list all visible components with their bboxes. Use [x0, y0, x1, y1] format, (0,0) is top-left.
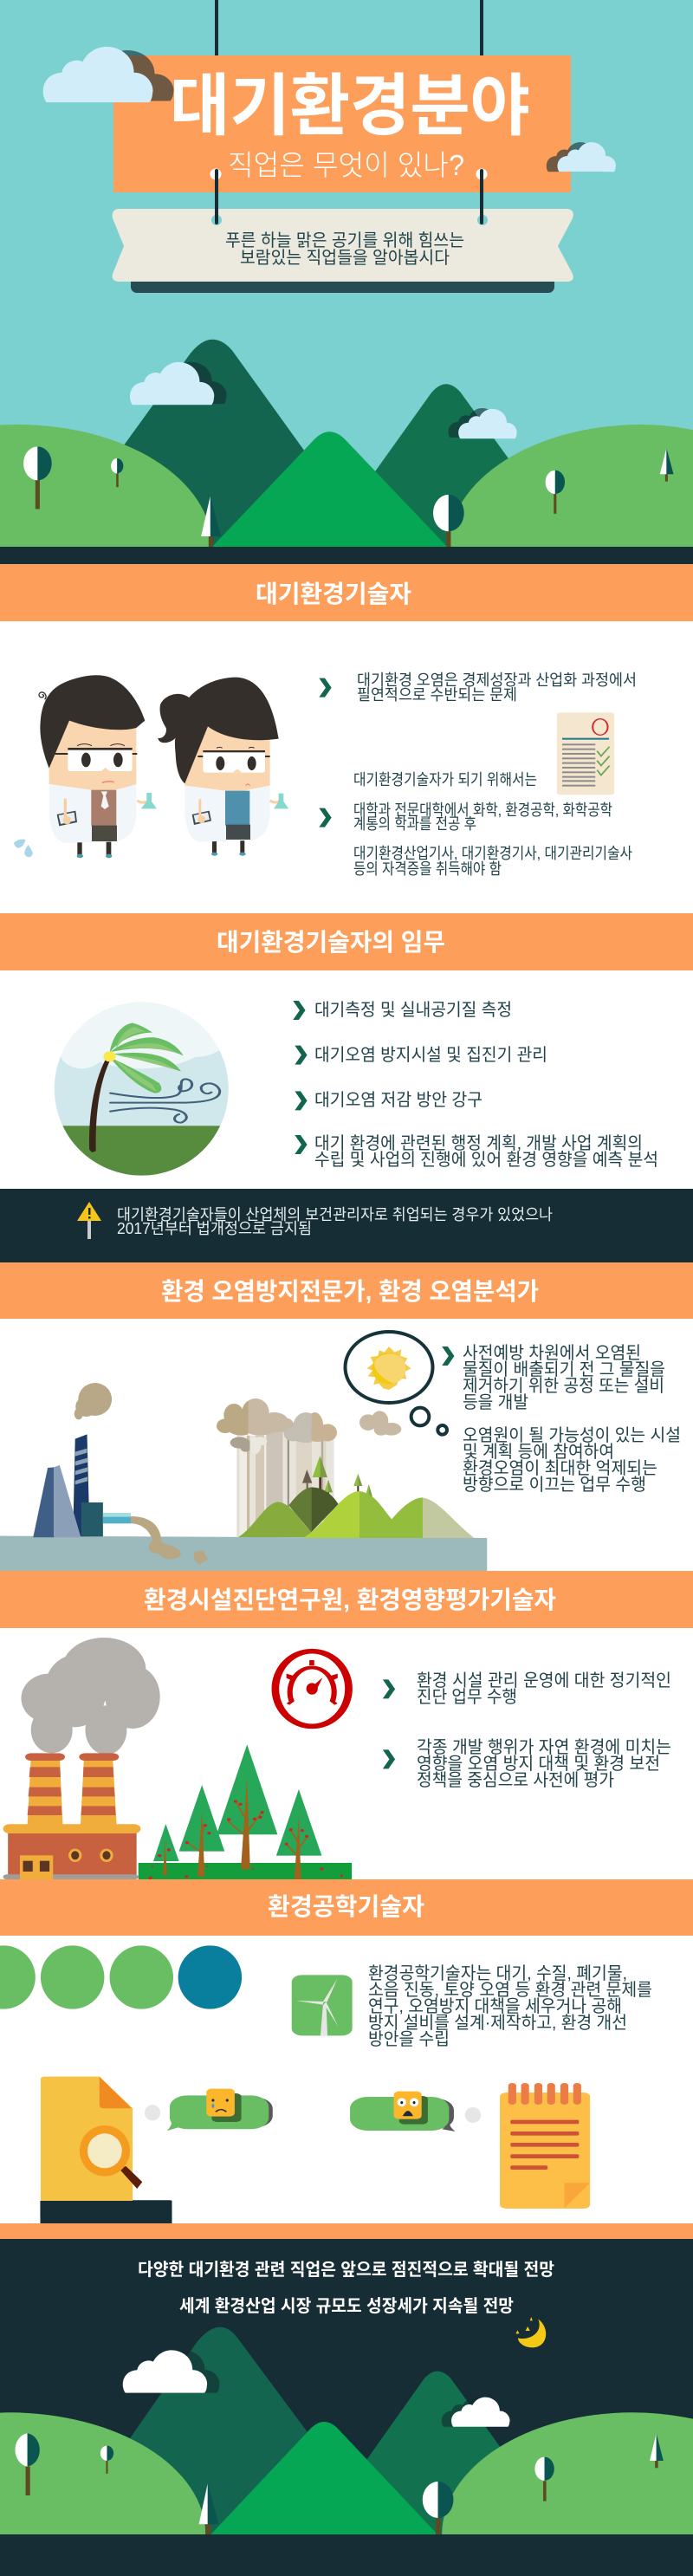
title: 대기환경분야: [170, 68, 530, 144]
footer text: [138, 2260, 554, 2316]
icon: chevron: [319, 678, 332, 698]
thought bubble: small circles: [411, 1408, 447, 1435]
list: duties: 대기측정 및 실내공기질 측정: [314, 1000, 512, 1020]
section header 1: [0, 564, 693, 621]
text block: environmental engineer: 환경공학기술자는 대기, 수질, 폐기물,: [368, 1963, 627, 1983]
trees: round and pine: [23, 446, 674, 547]
title board: [113, 55, 571, 192]
text block: prevention specialist: 물질이 배출되기 전 그 물질을: [463, 1359, 665, 1379]
icon: chevron: [319, 808, 332, 827]
factory towers: [33, 1434, 131, 1537]
text block: technician intro: 대학과 전문대학에서 화학, 환경공학, 화학공학: [353, 801, 612, 819]
icon: wind turbine: [292, 1975, 353, 2035]
orange stripe: [0, 2223, 693, 2239]
text block: environmental engineer: [368, 1963, 652, 2049]
mountain: center: [212, 431, 447, 547]
mountain: left: [63, 2327, 383, 2534]
background: sky: [0, 0, 693, 548]
hill: left: [0, 425, 212, 547]
mountain: right: [314, 2372, 563, 2534]
list: duties: 대기오염 방지시설 및 집진기 관리: [314, 1045, 547, 1065]
icon: gauge: [275, 1651, 349, 1726]
cloud: title right: [547, 142, 616, 172]
text block: diagnostics: 정책을 중심으로 사전에 평가: [417, 1770, 614, 1790]
bubble: shocked face: [350, 2092, 481, 2132]
section header 4: [0, 1571, 693, 1628]
text block: technician intro: 계통의 학과를 전공 후: [353, 815, 476, 833]
cloud: mountain left: [130, 362, 227, 405]
text block: diagnostics: 각종 개발 행위가 자연 환경에 미치는: [417, 1737, 671, 1757]
section header 2: 대기환경기술자의 임무: [217, 929, 445, 956]
text block: prevention specialist: 및 계획 등에 참여하여: [463, 1442, 614, 1462]
notice text: 대기환경기술자들이 산업체의 보건관리자로 취업되는 경우가 있었으나: [117, 1206, 553, 1223]
smoke cloud: right: [284, 1412, 337, 1443]
illustration: factory and forest: [3, 1638, 395, 1879]
bubble: sad face: [145, 2089, 273, 2131]
base block lower: [40, 2201, 172, 2224]
cloud: title left: [43, 47, 173, 102]
smoke cloud: small: [230, 1437, 267, 1454]
icon: chevron: [295, 1046, 308, 1065]
icon: warning sign: [77, 1202, 101, 1239]
text block: prevention specialist: 방향으로 이끄는 업무 수행: [463, 1475, 646, 1495]
smoke columns: [236, 1430, 334, 1536]
illustration: scientists: [14, 675, 288, 858]
ground: [0, 1536, 487, 1571]
smoke cloud: drifting: [359, 1411, 401, 1436]
ribbon text: 보람있는 직업들을 알아봅시다: [240, 248, 450, 268]
icon: notepad: [500, 2083, 590, 2209]
notice text: 2017년부터 법개정으로 금지됨: [117, 1220, 312, 1237]
icon: sun: [366, 1346, 411, 1390]
green mountains: [238, 1487, 474, 1538]
notice text: [117, 1206, 553, 1237]
character: woman: [158, 678, 288, 856]
icon: chevron: [295, 1091, 308, 1110]
text block: environmental engineer: 연구, 오염방지 대책을 세우거나 공해: [368, 1996, 622, 2016]
icon: chevron: [383, 1679, 395, 1698]
section header 4: 환경시설진단연구원, 환경영향평가기술자: [144, 1586, 556, 1613]
trees: round and pine: [15, 2433, 664, 2534]
ground: top: [0, 547, 693, 565]
text block: prevention specialist: [463, 1343, 681, 1495]
text block: technician intro: 대기환경산업기사, 대기환경기사, 대기관리기술사: [353, 845, 632, 862]
character: man: [39, 675, 157, 858]
thought bubble: [345, 1332, 433, 1403]
text block: environmental engineer: 방안을 수립: [368, 2029, 450, 2049]
text block: diagnostics: [417, 1671, 671, 1790]
icon: chevron: [293, 1001, 306, 1020]
footer text: 다양한 대기환경 관련 직업은 앞으로 점진적으로 확대될 전망: [138, 2260, 554, 2280]
cloud: mountain right: [448, 408, 517, 438]
list: duties: 대기 환경에 관련된 행정 계획, 개발 사업 계획의: [314, 1133, 643, 1153]
circles row: [0, 1945, 242, 2009]
illustration: factory and sewage: [0, 1383, 487, 1571]
footer background: [0, 2239, 693, 2576]
base block: [40, 2200, 172, 2218]
text block: prevention specialist: 등을 개발: [463, 1392, 528, 1412]
palm trunk: [89, 1060, 110, 1152]
ribbon text: 푸른 하늘 맑은 공기를 위해 힘쓰는: [225, 230, 464, 250]
footer text: 세계 환경산업 시장 규모도 성장세가 지속될 전망: [179, 2296, 514, 2316]
section header 1: 대기환경기술자: [256, 581, 411, 607]
icon and sun: [366, 1346, 454, 1390]
text block: technician intro: 등의 자격증을 취득해야 함: [353, 860, 502, 878]
text block: technician intro: 필연적으로 수반되는 문제: [357, 686, 517, 704]
icon: chevron: [295, 1135, 308, 1154]
list: duties: 수립 및 사업의 진행에 있어 환경 영향을 예측 분석: [314, 1150, 658, 1170]
icon: crescent moon: [515, 2317, 546, 2347]
mountain: right: [321, 384, 573, 547]
sewage: [131, 1516, 208, 1565]
illustration: top landscape: [0, 340, 693, 547]
section header 3: [0, 1262, 693, 1319]
factory: [3, 1753, 140, 1879]
text block: environmental engineer: 소음 진동, 토양 오염 등 환경 관련 문제를: [368, 1980, 652, 2000]
illustration: palm tree in wind: [53, 988, 308, 1178]
text block: prevention specialist: 환경오염이 최대한 억제되는: [463, 1458, 657, 1478]
icon: graded test paper: [557, 712, 614, 795]
icon: sweat drops: [14, 840, 33, 857]
icon: chevron: [442, 1346, 454, 1366]
subtitle: 직업은 무엇이 있나?: [228, 149, 464, 181]
illustration: night landscape: [0, 2317, 693, 2534]
hill: right: [449, 425, 693, 547]
illustration: polluted columns and hills: [217, 1398, 474, 1538]
hanging rope: upper: [215, 0, 483, 56]
icon: chevron: [383, 1749, 395, 1768]
wind lines: [111, 1079, 220, 1123]
text block: technician intro: 대기환경기술자가 되기 위해서는: [353, 771, 537, 788]
cloud: right: [442, 2398, 510, 2427]
section header 3: 환경 오염방지전문가, 환경 오염분석가: [161, 1278, 539, 1305]
pines: [302, 1456, 372, 1505]
palm leaves: [103, 1023, 184, 1093]
hill: right: [442, 2412, 693, 2534]
notice band: [0, 1189, 693, 1262]
ribbon text: [225, 230, 464, 268]
section header 5: 환경공학기술자: [268, 1893, 424, 1920]
section header 5: [0, 1879, 693, 1936]
text block: technician intro: 대기환경 오염은 경제성장과 산업화 과정에서: [357, 672, 637, 689]
illustration: engineering: [0, 1945, 590, 2218]
hanging details: [210, 168, 488, 225]
section header 2: [0, 913, 693, 970]
smoke cloud: large left: [217, 1398, 294, 1436]
list: duties: [314, 1000, 658, 1170]
list: duties: 대기오염 저감 방안 강구: [314, 1090, 483, 1110]
text block: diagnostics: 영향을 오염 방지 대책 및 환경 보전: [417, 1754, 660, 1774]
ribbon: [113, 209, 573, 282]
cloud: left: [123, 2350, 219, 2393]
ribbon shadow bar: [131, 276, 554, 293]
mountain: center: [210, 2422, 437, 2534]
text block: prevention specialist: 사전예방 차원에서 오염된: [463, 1343, 641, 1363]
text block: diagnostics: 진단 업무 수행: [417, 1687, 517, 1707]
text block: prevention specialist: 오염원이 될 가능성이 있는 시설: [463, 1425, 681, 1445]
mountain: left: [50, 340, 373, 547]
smoke puff: [74, 1383, 112, 1419]
forest: [139, 1744, 352, 1879]
scene circle: [54, 1002, 229, 1176]
text block: environmental engineer: 방지 설비를 설계·제작하고, 환경 개선: [368, 2013, 627, 2033]
text block: diagnostics: 환경 시설 관리 운영에 대한 정기적인: [417, 1671, 671, 1690]
text block: technician intro: [353, 672, 637, 878]
icon: document with magnifier: [41, 2077, 142, 2203]
hill: left: [0, 2412, 205, 2534]
icons and test paper: technician: [319, 678, 614, 827]
smoke: [21, 1638, 160, 1755]
text block: prevention specialist: 제거하기 위한 공정 또는 설비: [463, 1376, 664, 1396]
